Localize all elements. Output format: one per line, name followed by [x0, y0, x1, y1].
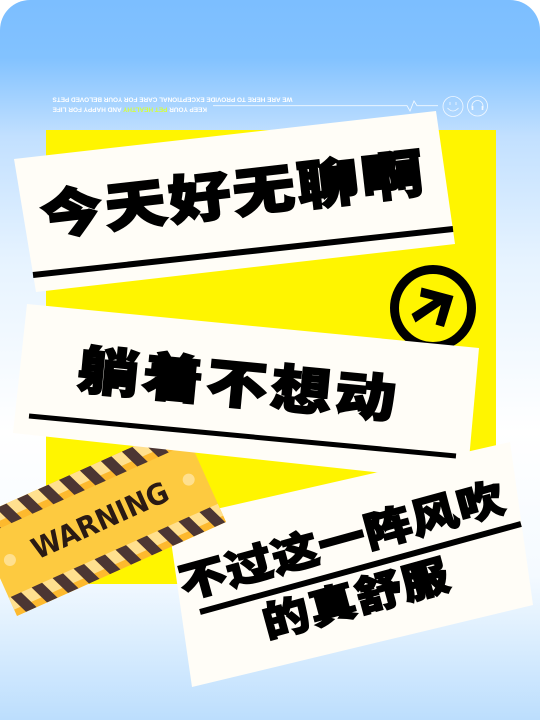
heading: fourth line text: 的真舒服 — [258, 553, 455, 647]
heading: third line text: 不过这一阵风吹 — [174, 475, 510, 608]
panel: third line — [168, 442, 533, 687]
icon: smiley — [443, 96, 463, 116]
warning label: WARNING — [26, 475, 174, 566]
heading: second line text: 躺着不想动 — [75, 341, 402, 429]
icon: headphones — [468, 96, 488, 116]
underline — [33, 229, 453, 275]
panel: first line — [14, 111, 455, 292]
warning sign — [0, 446, 226, 616]
icon: arrow — [412, 288, 454, 327]
bottom stripes — [9, 504, 226, 612]
underline — [29, 416, 456, 456]
underline — [200, 524, 521, 612]
header text: tagline: KEEP YOUR PET HEALTHY AND HAPPY FOR LIFE — [52, 106, 207, 113]
bottom band — [9, 504, 226, 616]
header strip — [52, 95, 487, 116]
arrow badge — [394, 270, 472, 346]
header pulse line — [213, 101, 438, 111]
header text: mission statement: WE ARE HERE TO PROVIDE EXCEPTIONAL CARE FOR YOUR BELOVED PETS — [52, 95, 292, 102]
warning dots — [2, 472, 197, 568]
top band — [0, 446, 173, 528]
heading: first line text: 今天好无聊啊 — [38, 145, 429, 247]
yellow backdrop — [46, 130, 496, 584]
top stripes — [0, 446, 169, 528]
panel: second line — [13, 304, 479, 482]
